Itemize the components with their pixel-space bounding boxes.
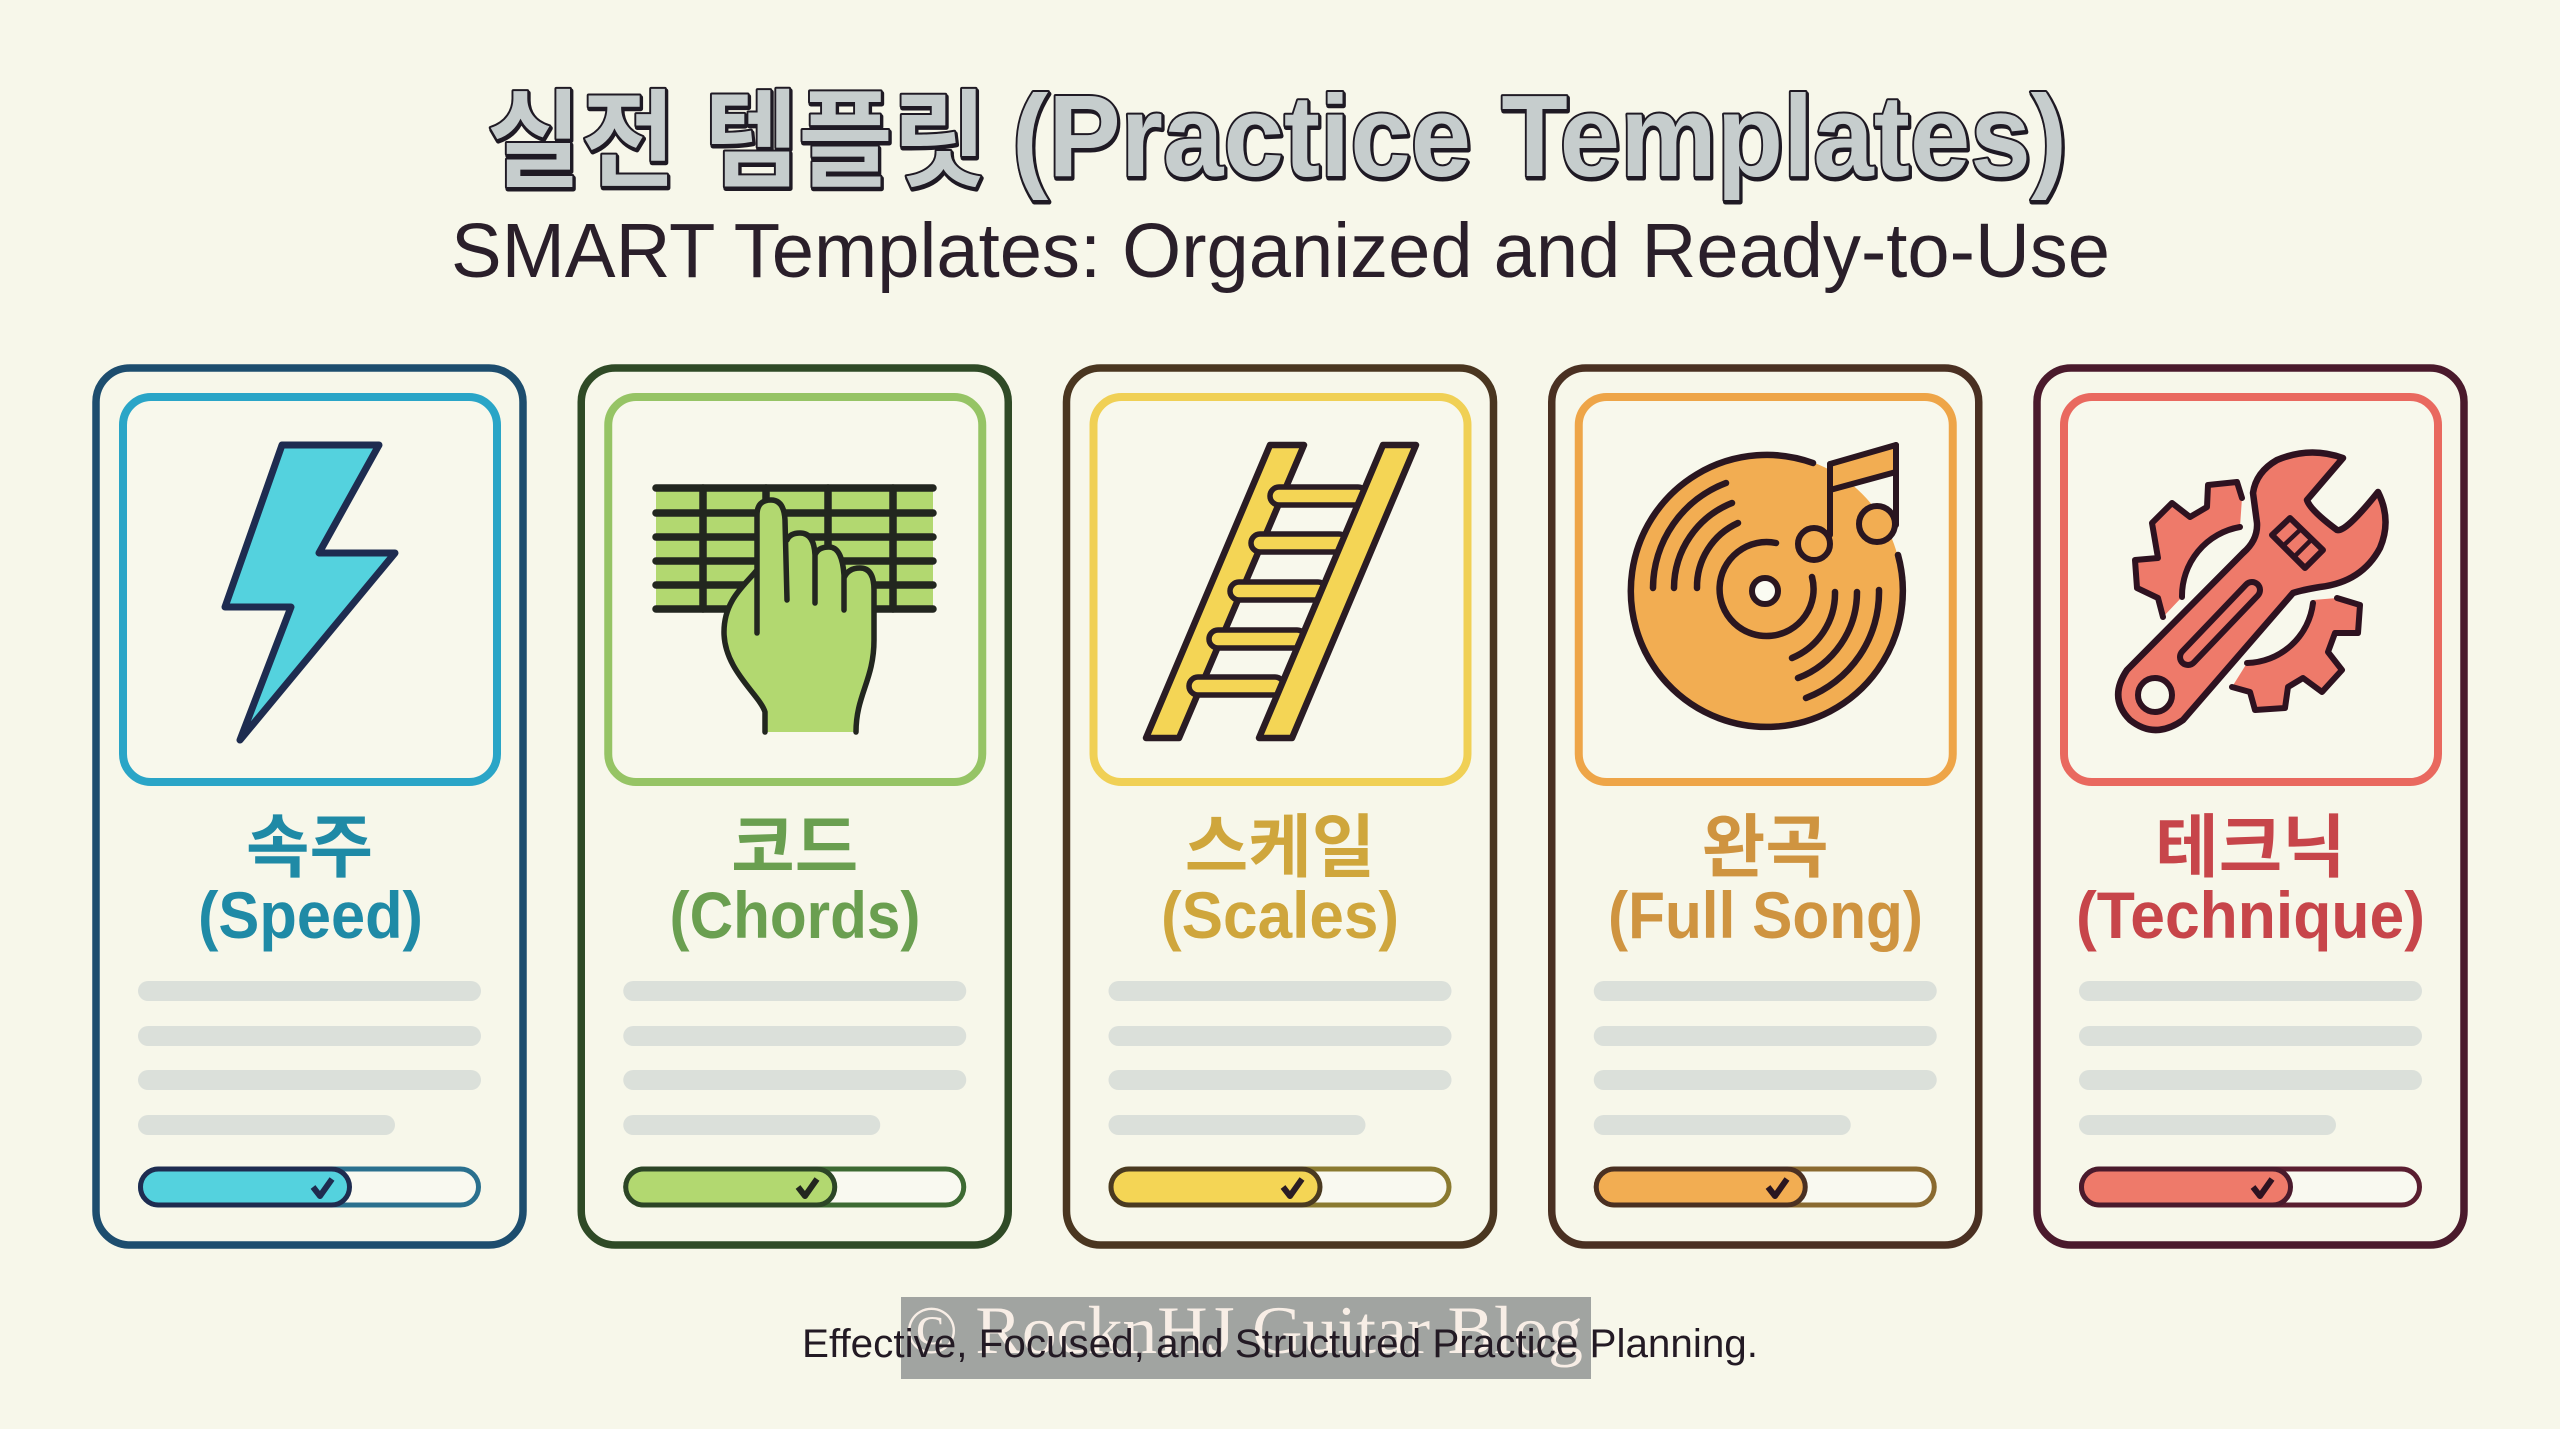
title: (Practice Templates)	[1013, 73, 2068, 203]
icon: ladder	[1146, 445, 1416, 738]
placeholder text lines	[1108, 981, 1452, 1135]
heading: full song: (Full Song)	[1608, 878, 1923, 952]
heading: chords	[670, 791, 920, 952]
heading: technique: 테크닉	[2155, 791, 2346, 891]
title: 실전 템플릿	[487, 83, 987, 201]
card frame	[1552, 368, 1979, 1245]
heading: speed	[198, 791, 423, 952]
title: (Practice Templates)	[1012, 71, 2067, 201]
icon frame	[608, 397, 982, 782]
progress bar	[1596, 1169, 1934, 1205]
title: 실전 템플릿	[488, 85, 988, 203]
heading: chords: (Chords)	[670, 878, 920, 952]
heading: scales: 스케일	[1185, 791, 1375, 891]
title	[487, 71, 2068, 203]
placeholder text lines	[1594, 981, 1937, 1135]
watermark: © RocknHJ Guitar Blog	[905, 1292, 1583, 1368]
icon: lightning bolt	[225, 445, 395, 740]
placeholder text lines	[2079, 981, 2422, 1135]
footer caption: Effective, Focused, and Structured Practice Planning.	[802, 1322, 1758, 1366]
card frame	[2037, 368, 2464, 1245]
icon: wrench and gear	[2118, 452, 2386, 730]
heading: speed: 속주	[246, 791, 373, 891]
heading: technique	[2076, 791, 2425, 952]
icon frame	[1579, 397, 1953, 782]
icon frame	[2064, 397, 2438, 782]
heading: scales: (Scales)	[1161, 878, 1399, 952]
placeholder text lines	[623, 981, 966, 1135]
panel: speed card	[96, 368, 523, 1245]
card frame	[581, 368, 1008, 1245]
card frame	[96, 368, 523, 1245]
card frame	[1066, 368, 1494, 1245]
progress bar	[626, 1169, 964, 1205]
heading: chords: 코드	[731, 791, 858, 891]
icon frame	[123, 397, 497, 782]
placeholder text lines	[138, 981, 481, 1135]
heading: full song: 완곡	[1702, 791, 1829, 891]
panel: technique card	[2037, 368, 2464, 1245]
progress bar	[1111, 1169, 1449, 1205]
heading: scales	[1161, 791, 1399, 952]
heading: full song	[1608, 791, 1923, 952]
progress bar	[140, 1169, 478, 1205]
heading: speed: (Speed)	[198, 878, 423, 952]
icon frame	[1094, 397, 1468, 782]
heading: technique: (Technique)	[2076, 878, 2425, 952]
panel: chords card	[581, 368, 1008, 1245]
icon: vinyl record with music note	[1630, 445, 1903, 727]
icon: hand on fretboard	[656, 488, 933, 732]
panel: scales card	[1066, 368, 1494, 1245]
subtitle: SMART Templates: Organized and Ready-to-Use	[451, 208, 2110, 294]
panel: full song card	[1552, 368, 1979, 1245]
progress bar	[2082, 1169, 2420, 1205]
